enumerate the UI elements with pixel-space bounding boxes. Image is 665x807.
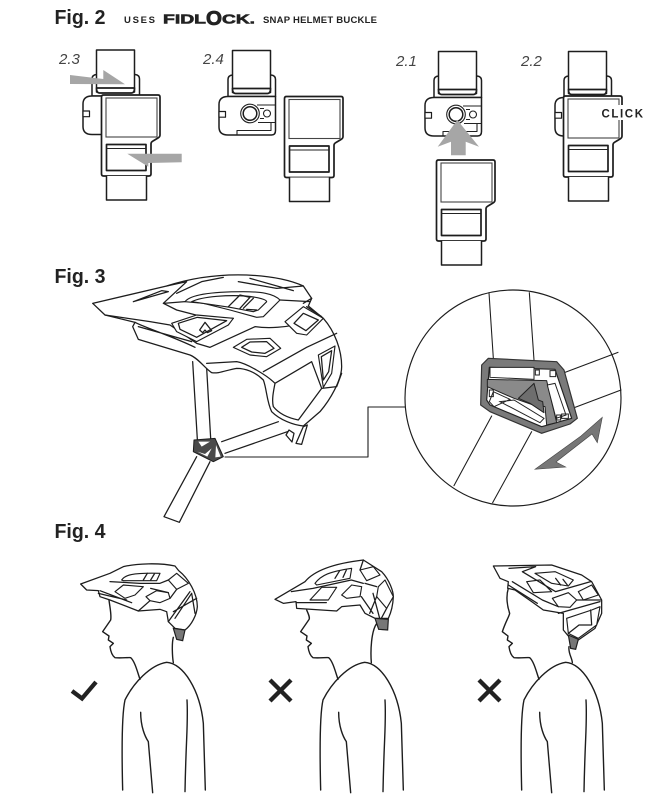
side vent [233,338,281,357]
buckle interior [487,367,572,427]
logo [200,322,212,333]
step 2.2: buckle clicks shut: CLICK [602,108,644,120]
icon: cross mark [270,680,291,701]
cheek panel [207,333,342,420]
step 2.4: buckle separated [202,50,343,202]
icon: check mark [72,682,96,698]
straps in detail [454,293,621,503]
buckle [173,628,185,641]
heading: Fig. 4: Fig. 4 [54,521,106,543]
subtitle: uses Fidlock snap helmet buckle: USES [124,15,155,26]
person [301,610,403,793]
step 2.1: bring the buckle together [395,52,495,265]
subtitle: uses Fidlock snap helmet buckle: SNAP HELMET BUCKLE [263,15,377,26]
subtitle: uses Fidlock snap helmet buckle: FIDL [163,12,206,26]
arrow: strap adjustment direction [535,417,602,469]
rear side vent [318,346,335,387]
subtitle: uses Fidlock snap helmet buckle: CK. [222,12,255,26]
helmet [493,565,602,640]
step 2.3: squeeze to release: 2.3 [58,51,81,68]
icon: cross mark [479,680,500,701]
detail circle: buckle close-up [405,290,621,506]
top vent [185,292,280,317]
buckle [568,635,578,649]
step 2.1: bring the buckle together: 2.1 [395,53,417,70]
strap hooks [286,425,307,444]
step 2.2: buckle clicks shut: 2.2 [520,53,543,70]
heading: Fig. 2: Fig. 2 [54,7,106,29]
figure: helmet tilted back, wrong [275,560,403,793]
helmet side view with straps [93,275,342,522]
buckle mechanism [487,379,557,425]
visor ribs [133,277,312,318]
helmet shell [93,275,342,426]
subtitle: uses Fidlock snap helmet buckle: O [206,8,222,30]
step 2.4: buckle separated: 2.4 [202,51,224,68]
figure: helmet level, correct [81,564,205,793]
visor lower line [105,315,323,347]
buckle outer frame [481,358,577,433]
helmet [81,564,197,630]
buckle [375,618,388,630]
step 2.2: buckle clicks shut [520,52,644,201]
person [502,588,604,793]
diamond vent with logo [172,315,233,342]
helmet [275,560,393,618]
chin straps [164,362,287,522]
person [103,600,205,793]
figure: helmet tilted forward, wrong [493,565,604,793]
step 2.3: squeeze to release [58,50,182,200]
heading: Fig. 3: Fig. 3 [54,266,106,288]
leader line from buckle to detail [225,407,405,457]
strap buckle [193,438,223,462]
rear top vent [285,307,323,335]
subtitle: uses Fidlock snap helmet buckle [124,8,377,30]
